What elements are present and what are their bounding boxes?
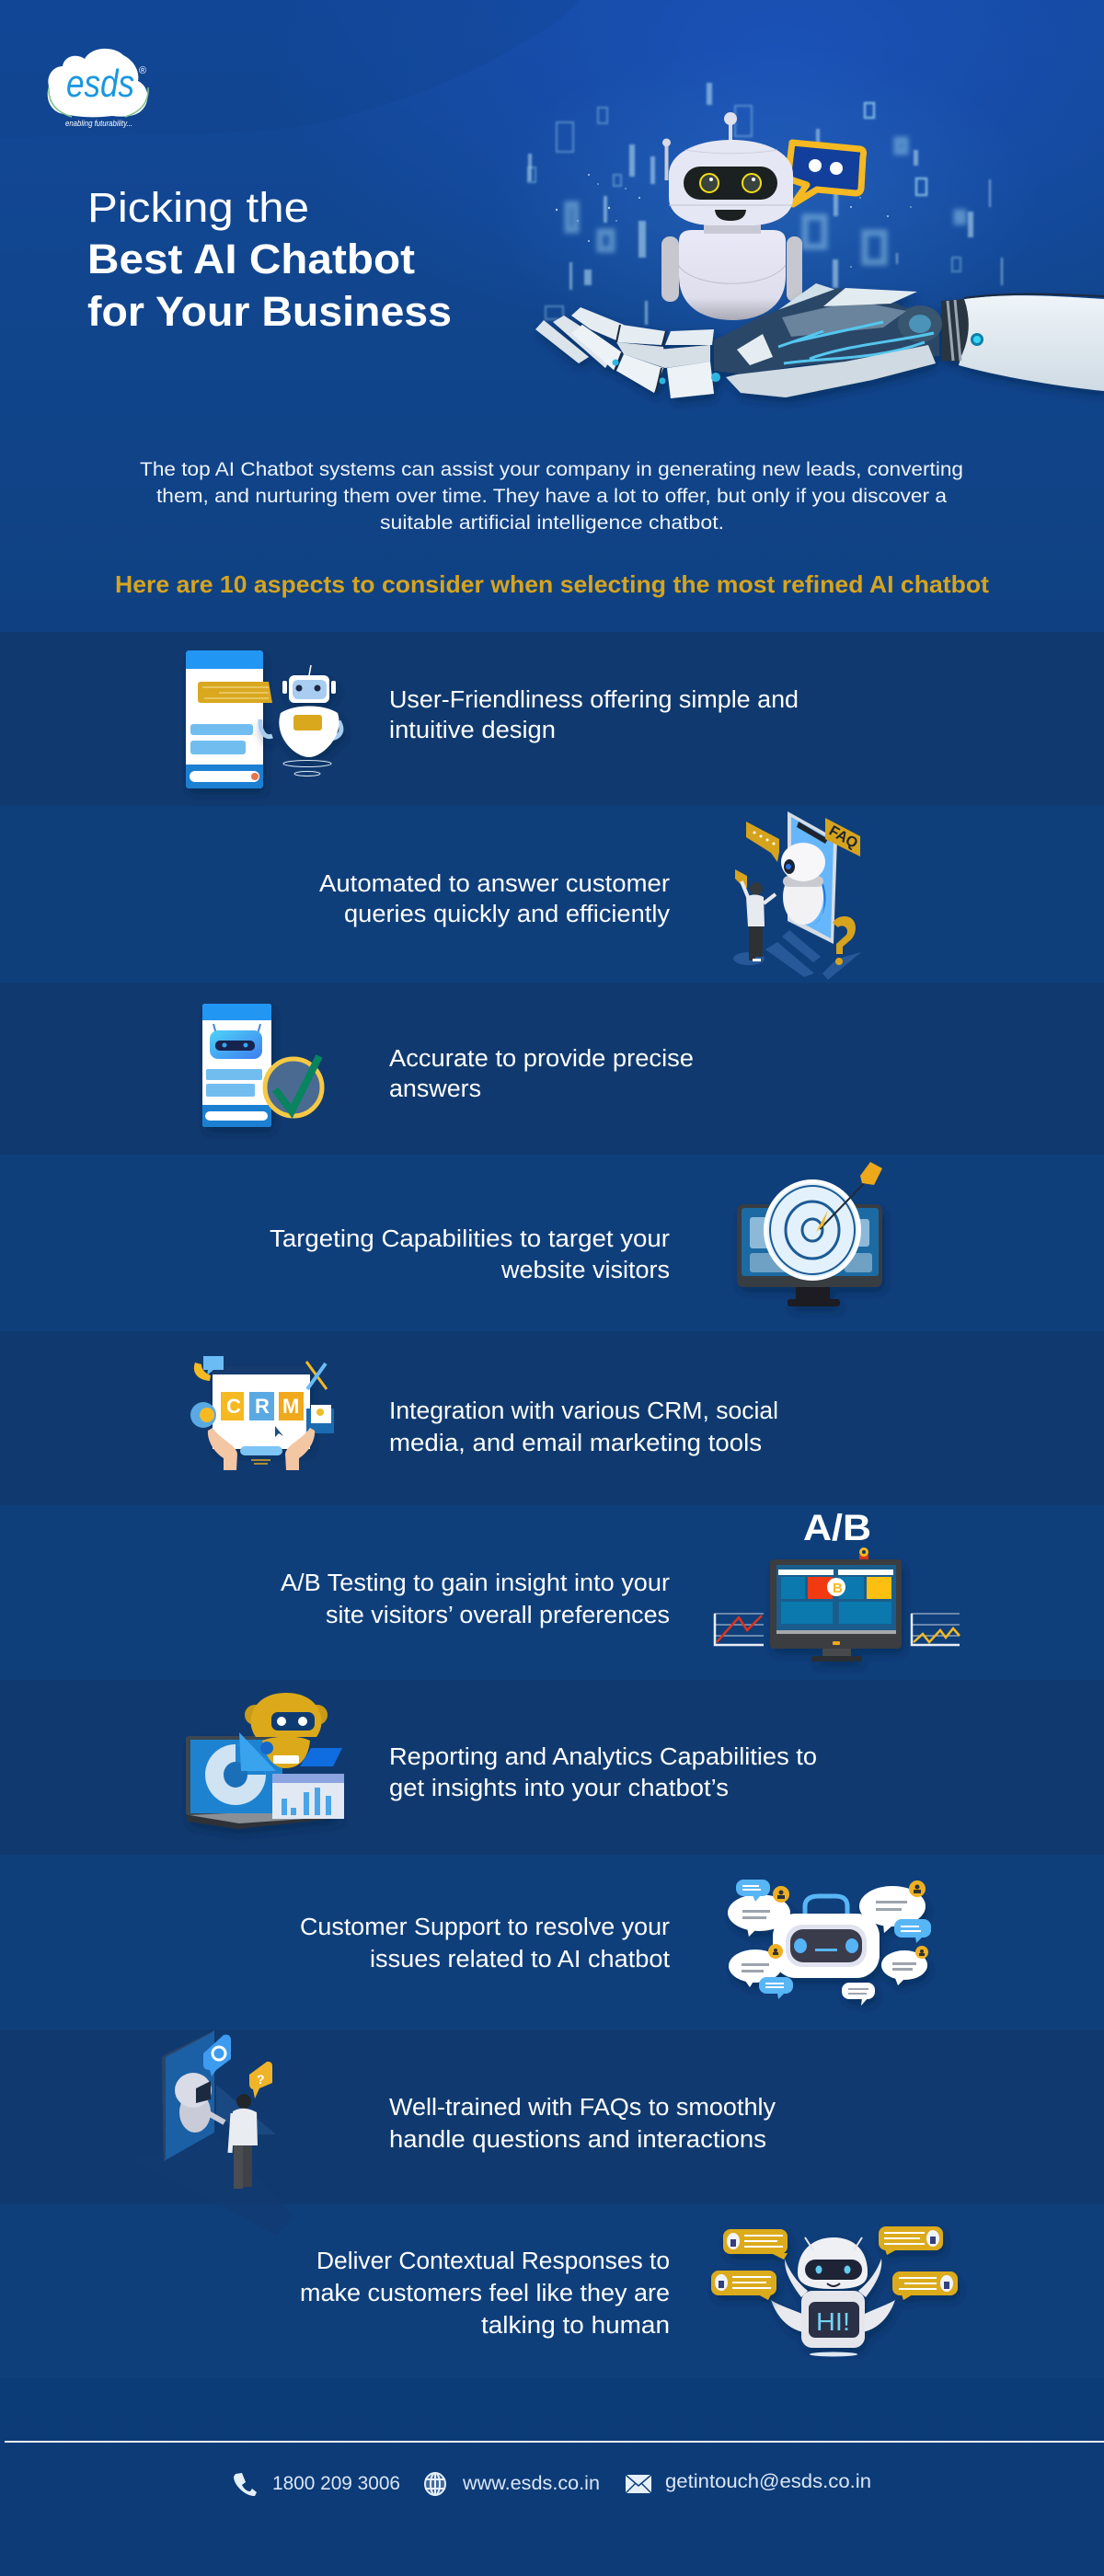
icon: A/B monitor and charts: A/B <box>803 1508 871 1548</box>
text: Targeting Capabilities to target your <box>270 1226 671 1252</box>
icon: phone with check mark <box>202 1004 322 1127</box>
icon: phone chat with robot <box>186 650 341 788</box>
text <box>389 2095 776 2153</box>
text: Reporting and Analytics Capabilities to <box>389 1744 817 1770</box>
text: User-Friendliness offering simple and <box>389 687 799 713</box>
panel band 3 <box>0 983 1104 1155</box>
text <box>281 1570 671 1628</box>
text: intuitive design <box>389 718 556 743</box>
icon: phone <box>234 2473 257 2496</box>
icon: monitor with target <box>737 1162 882 1306</box>
text: Deliver Contextual Responses to <box>316 2248 670 2274</box>
palm back <box>733 283 842 333</box>
icon: CRM document in hands: R <box>255 1395 270 1418</box>
robot <box>661 112 802 320</box>
panel band 2 <box>0 806 1104 983</box>
text: get insights into your chatbot’s <box>389 1776 729 1801</box>
icon: CRM document in hands: C <box>226 1395 241 1418</box>
fingers <box>535 307 714 398</box>
panel band 1 <box>0 632 1104 806</box>
text: answers <box>389 1076 481 1102</box>
panel band 8 <box>0 1855 1104 2030</box>
item 6: A/B testing <box>281 1508 960 1662</box>
text <box>389 1744 817 1801</box>
subheading: Here are 10 aspects to consider when selecting the most refined AI chatbot <box>115 570 989 598</box>
email: getintouch@esds.co.in <box>665 2471 871 2492</box>
icon: FAQ phone with person <box>733 811 861 980</box>
title: for Your Business <box>87 288 452 335</box>
text <box>389 687 799 743</box>
logo: esds <box>48 49 148 129</box>
text: media, and email marketing tools <box>389 1431 762 1456</box>
icon: FAQ phone with person: FAQ <box>826 823 860 852</box>
icon: man talking to robot on tablet <box>129 2030 294 2236</box>
logo: esds: ® <box>139 65 146 76</box>
text: Accurate to provide precise <box>389 1046 694 1072</box>
lower palm strip <box>726 345 936 397</box>
item 4: targeting <box>270 1162 882 1306</box>
website: www.esds.co.in <box>462 2473 600 2494</box>
text: Automated to answer customer <box>319 871 671 897</box>
text <box>300 1915 671 1972</box>
mechanical palm <box>714 288 939 374</box>
text: talking to human <box>481 2313 670 2339</box>
text <box>319 871 671 927</box>
icon: man talking to robot on tablet: ? <box>257 2072 265 2087</box>
forearm <box>959 295 1104 391</box>
text <box>300 2248 670 2339</box>
title: Best AI Chatbot <box>87 236 415 282</box>
text: A/B Testing to gain insight into your <box>281 1570 671 1596</box>
text: queries quickly and efficiently <box>344 902 670 927</box>
intro paragraph: them, and nurturing them over time. They have a lot to offer, but only if you discover a <box>156 485 947 507</box>
icon: laptop with yellow robot <box>186 1693 347 1829</box>
item 5: integration <box>190 1356 778 1470</box>
robotic hand <box>535 283 1104 398</box>
text: website visitors <box>500 1258 670 1283</box>
speech bubble <box>788 143 864 204</box>
text: issues related to AI chatbot <box>370 1947 670 1972</box>
thumb base <box>737 334 773 365</box>
title <box>87 184 452 335</box>
logo: esds: enabling futurability... <box>65 119 132 129</box>
icon: A/B monitor and charts <box>714 1508 960 1662</box>
item 3: accurate <box>202 1004 694 1127</box>
text: Integration with various CRM, social <box>389 1398 778 1424</box>
text: Well-trained with FAQs to smoothly <box>389 2095 776 2121</box>
item 8: customer support <box>300 1880 931 2006</box>
text: make customers feel like they are <box>300 2281 670 2306</box>
panel band 10 <box>0 2204 1104 2378</box>
panel band 7 <box>0 1680 1104 1855</box>
footer contacts <box>234 2471 871 2496</box>
icon: HI robot with bubbles <box>711 2226 958 2357</box>
item 7: reporting <box>186 1693 817 1829</box>
icon: HI robot with bubbles: HI! <box>816 2307 850 2336</box>
logo: esds: esds <box>66 62 134 105</box>
text: Customer Support to resolve your <box>300 1915 671 1940</box>
hero illustration: robot on robotic hand <box>488 46 1104 398</box>
text: site visitors’ overall preferences <box>326 1603 670 1628</box>
panel band 9 <box>0 2030 1104 2204</box>
intro paragraph: The top AI Chatbot systems can assist your company in generating new leads, converting <box>140 458 963 480</box>
title: Picking the <box>87 184 309 231</box>
icon: A/B monitor and charts: B <box>833 1581 843 1596</box>
item 9: well-trained <box>129 2030 776 2236</box>
phone number: 1800 209 3006 <box>272 2473 400 2494</box>
text <box>389 1398 778 1456</box>
panel band 6 <box>0 1505 1104 1680</box>
item 2: automated <box>319 811 861 980</box>
item 10: contextual responses <box>300 2226 958 2357</box>
intro paragraph: suitable artificial intelligence chatbot. <box>380 512 724 534</box>
intro paragraph <box>140 458 963 534</box>
list bands <box>0 632 1104 2378</box>
text <box>270 1226 671 1283</box>
icon: globe <box>425 2473 445 2495</box>
text: handle questions and interactions <box>389 2127 766 2153</box>
icon: mail <box>626 2475 651 2493</box>
icon: robot with speech bubbles <box>728 1880 931 2006</box>
panel band 4 <box>0 1155 1104 1331</box>
data particles <box>488 46 1040 359</box>
item 1: user-friendliness <box>186 650 799 788</box>
icon: CRM document in hands <box>190 1356 334 1470</box>
panel band 5 <box>0 1331 1104 1505</box>
icon: CRM document in hands: M <box>282 1395 299 1418</box>
text <box>389 1046 694 1102</box>
